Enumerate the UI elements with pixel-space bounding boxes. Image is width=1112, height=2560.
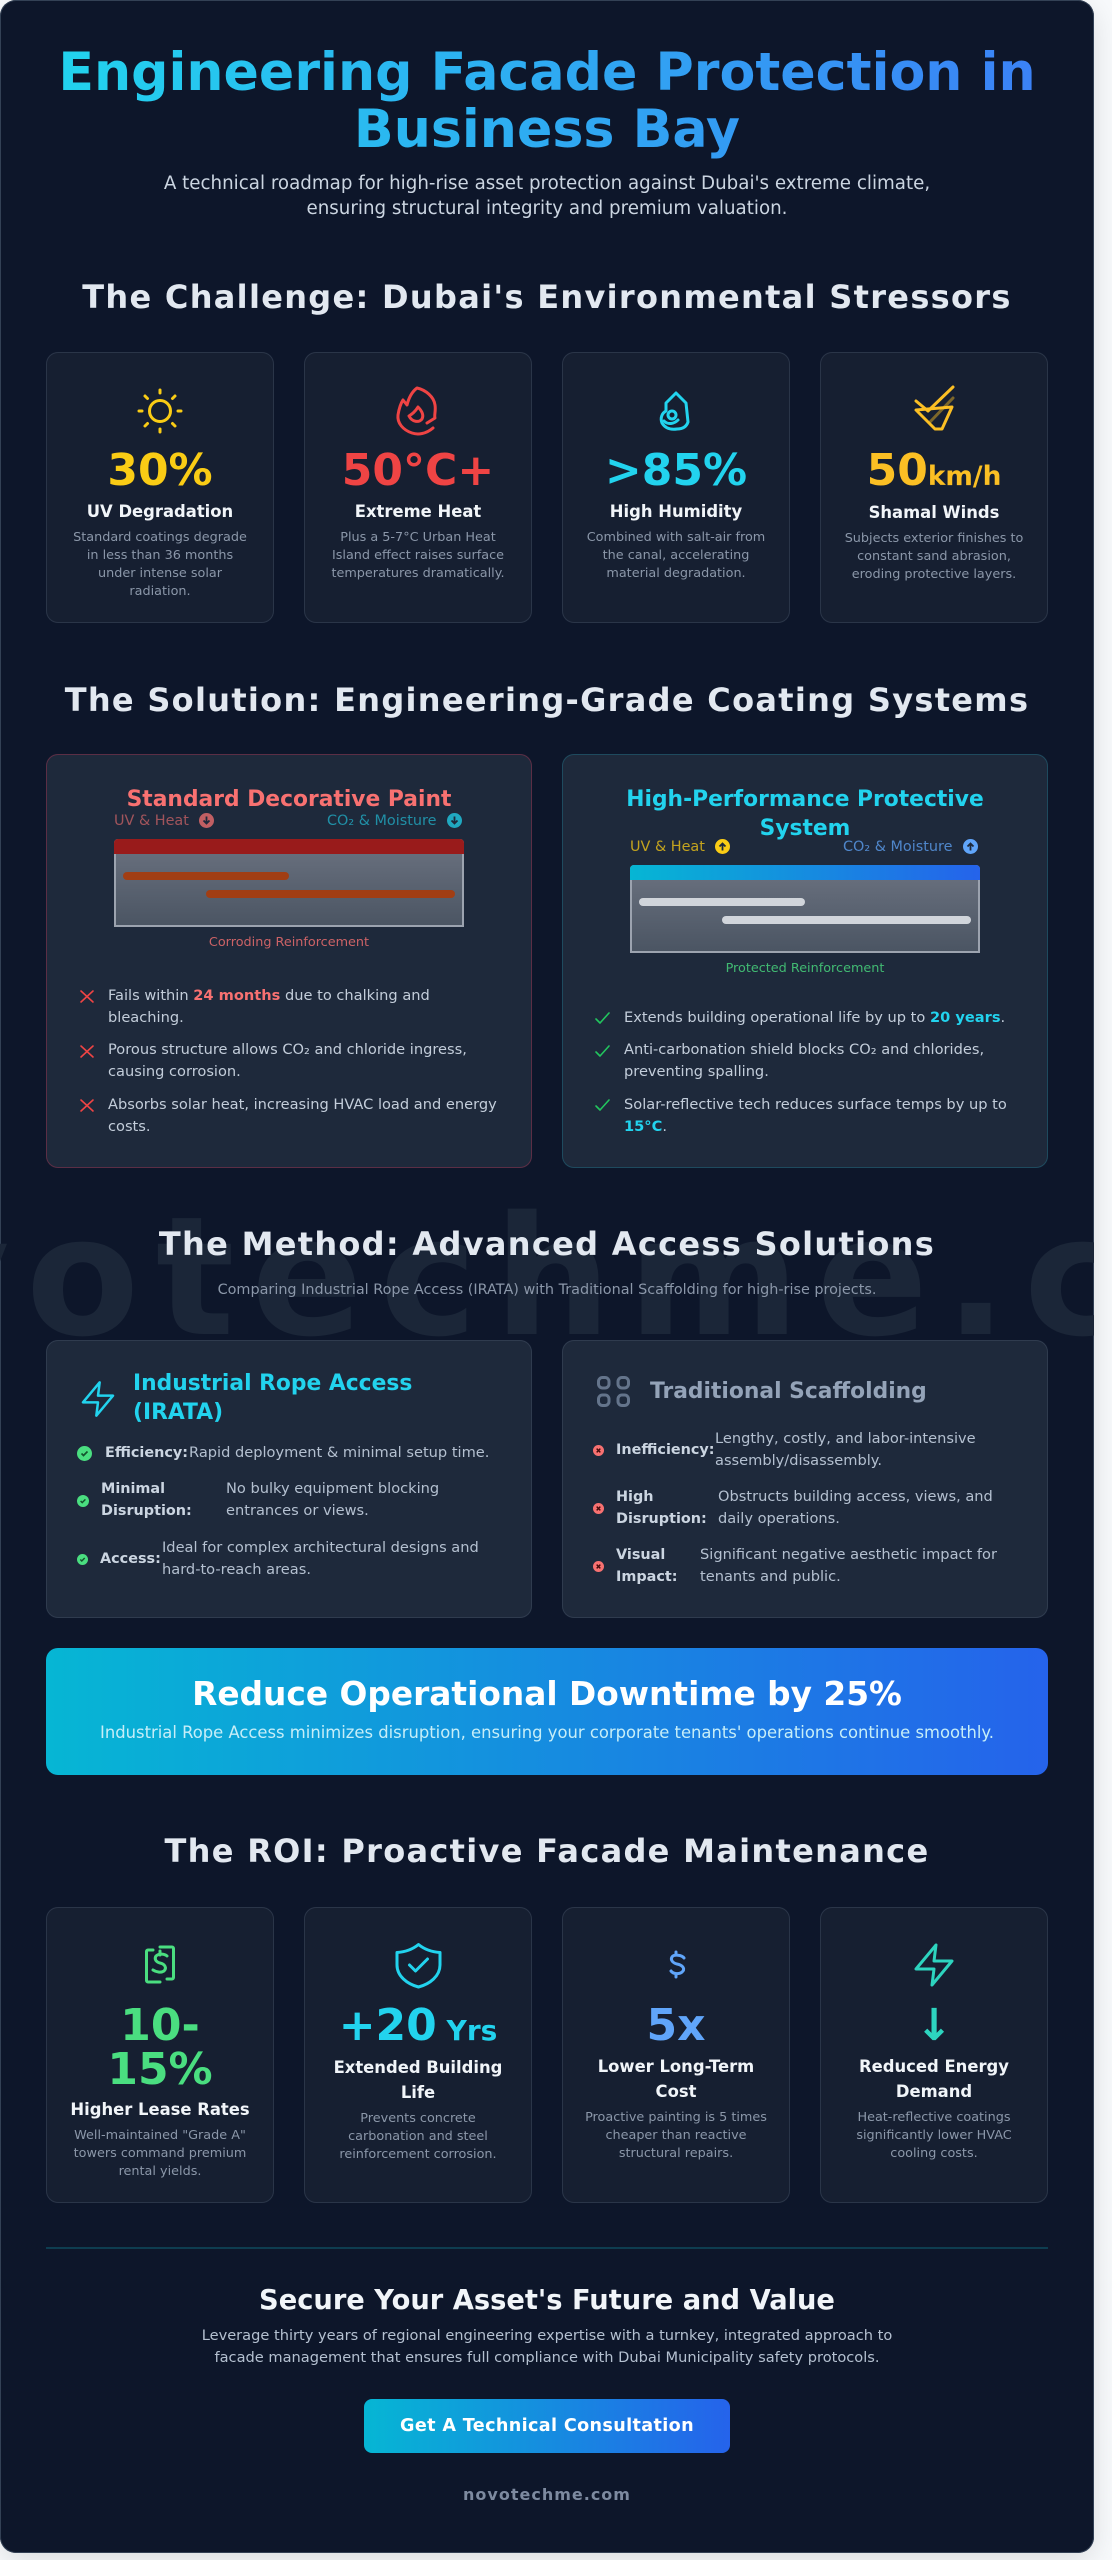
text bbox=[616, 1544, 678, 1588]
rebar bottom bbox=[722, 916, 971, 924]
item bbox=[108, 1041, 467, 1080]
banner heading: Reduce Operational Downtime by 25% bbox=[192, 1675, 902, 1713]
diagram caption: Corroding Reinforcement bbox=[209, 935, 369, 950]
panel title: Standard Decorative Paint bbox=[127, 787, 451, 812]
stat label: High Humidity bbox=[610, 502, 742, 521]
icon: cross bbox=[593, 1502, 604, 1514]
text: Inefficiency: bbox=[616, 1442, 715, 1458]
icon: scaffold grid bbox=[597, 1376, 630, 1407]
stat: >85% bbox=[605, 445, 747, 496]
closing text: Leverage thirty years of regional engineering expertise with a turnkey, integrated approach to bbox=[202, 2327, 892, 2344]
description: rental yields. bbox=[119, 2164, 201, 2179]
description: reinforcement corrosion. bbox=[339, 2147, 497, 2162]
rebar bottom bbox=[206, 890, 455, 898]
coating layer bbox=[630, 865, 980, 880]
label: UV and heat: UV & Heat bbox=[630, 839, 705, 855]
list item: inefficiency bbox=[562, 1428, 1048, 1474]
icon: flame bbox=[396, 386, 437, 436]
text: Obstructs building access, views, and bbox=[718, 1488, 993, 1505]
description: temperatures dramatically. bbox=[331, 566, 505, 581]
stat: 30% bbox=[107, 445, 213, 496]
icon: bolt bbox=[910, 1941, 958, 1989]
text: Rapid deployment & minimal setup time. bbox=[189, 1444, 489, 1461]
stat label: Higher Lease Rates bbox=[70, 2100, 250, 2118]
text: Efficiency: bbox=[105, 1445, 188, 1461]
item bbox=[108, 1096, 497, 1135]
card: UV degradation bbox=[46, 352, 274, 623]
icon: check bbox=[595, 1099, 610, 1111]
text: Lengthy, costly, and labor-intensive bbox=[715, 1430, 976, 1447]
diagram caption: Protected Reinforcement bbox=[726, 961, 884, 976]
description: Island effect raises surface bbox=[332, 548, 504, 563]
list: benefits bbox=[595, 1008, 1007, 1135]
text: entrances or views. bbox=[226, 1502, 369, 1519]
icon: check bbox=[77, 1446, 92, 1461]
list: failures bbox=[80, 987, 497, 1135]
text: Minimal bbox=[101, 1481, 165, 1497]
icon: bolt bbox=[82, 1381, 114, 1417]
button: Get A Technical Consultation bbox=[400, 2416, 694, 2436]
description: cheaper than reactive bbox=[605, 2128, 747, 2143]
button bbox=[364, 2399, 730, 2453]
description: Proactive painting is 5 times bbox=[585, 2110, 767, 2124]
stat label: Life bbox=[401, 2082, 435, 2102]
panel title bbox=[133, 1370, 412, 1424]
description bbox=[562, 2108, 790, 2163]
title bbox=[58, 43, 1036, 160]
panel: high-performance protective system bbox=[562, 754, 1048, 1168]
panel: scaffolding bbox=[562, 1340, 1048, 1618]
icon: down arrow CO2 bbox=[447, 813, 462, 828]
stat label bbox=[304, 2054, 532, 2104]
item: preventing spalling. bbox=[624, 1063, 769, 1080]
banner text: Industrial Rope Access minimizes disruption, ensuring your corporate tenants' operations continue smoothly. bbox=[100, 1723, 994, 1742]
subtitle: A technical roadmap for high-rise asset protection against Dubai's extreme climate, bbox=[164, 172, 930, 194]
coating layer bbox=[114, 839, 464, 854]
closing text bbox=[0, 2325, 1094, 2369]
text: daily operations. bbox=[718, 1510, 840, 1527]
description: structural repairs. bbox=[619, 2146, 733, 2161]
stat label: Reduced Energy bbox=[859, 2056, 1009, 2076]
text bbox=[162, 1537, 479, 1581]
stat label: Demand bbox=[896, 2082, 972, 2100]
description: Standard coatings degrade bbox=[73, 530, 247, 544]
text bbox=[616, 1486, 707, 1530]
item: causing corrosion. bbox=[108, 1063, 241, 1080]
description: Prevents concrete bbox=[360, 2110, 476, 2126]
description: in less than 36 months bbox=[87, 548, 233, 563]
icon: check bbox=[595, 1045, 610, 1057]
description: towers command premium bbox=[74, 2146, 246, 2161]
title: Engineering Facade Protection in bbox=[58, 43, 1036, 103]
item: Fails within 24 months due to chalking and bbox=[108, 987, 430, 1004]
text: No bulky equipment blocking bbox=[226, 1480, 439, 1497]
description: under intense solar bbox=[98, 566, 222, 581]
stat: 15% bbox=[107, 2044, 213, 2094]
stat: +20 Yrs bbox=[339, 2000, 497, 2050]
card: high humidity bbox=[562, 352, 790, 623]
heading: the method: The Method: Advanced Access Solutions bbox=[159, 1225, 935, 1263]
stat label: Shamal Winds bbox=[869, 503, 999, 522]
card: extreme heat bbox=[304, 352, 532, 623]
item: Absorbs solar heat, increasing HVAC load and energy bbox=[108, 1096, 497, 1113]
heading: the solution: The Solution: Engineering-Grade Coating Systems bbox=[65, 681, 1029, 719]
description bbox=[845, 530, 1023, 582]
label: CO2 and moisture: CO₂ & Moisture bbox=[843, 839, 952, 855]
description bbox=[331, 530, 505, 581]
stat: 50km/h bbox=[867, 445, 1001, 496]
list item: access bbox=[46, 1537, 532, 1583]
icon: cross bbox=[593, 1444, 604, 1456]
item: Solar-reflective tech reduces surface temps by up to bbox=[624, 1096, 1007, 1113]
stat arrow: ↓ bbox=[916, 2000, 952, 2050]
callout banner bbox=[46, 1648, 1048, 1775]
text: Impact: bbox=[616, 1569, 678, 1585]
stat: 5x bbox=[646, 2000, 706, 2050]
text bbox=[101, 1481, 192, 1519]
description bbox=[587, 530, 765, 581]
panel title: (IRATA) bbox=[133, 1400, 223, 1424]
subtitle: ensuring structural integrity and premium valuation. bbox=[306, 198, 788, 219]
icon: shield check bbox=[395, 1943, 442, 1988]
stat label bbox=[562, 2054, 790, 2104]
item: 15°C. bbox=[624, 1118, 667, 1135]
item bbox=[108, 987, 430, 1026]
panel: standard decorative paint bbox=[46, 754, 532, 1168]
label: CO2 and moisture: CO₂ & Moisture bbox=[327, 813, 436, 829]
description: Well-maintained "Grade A" bbox=[74, 2128, 246, 2142]
heading: the ROI: The ROI: Proactive Facade Maintenance bbox=[165, 1832, 929, 1870]
item: Extends building operational life by up to 20 years. bbox=[624, 1008, 1005, 1026]
icon: dollar note bbox=[136, 1941, 184, 1989]
icon: check bbox=[77, 1495, 89, 1507]
text: assembly/disassembly. bbox=[715, 1452, 882, 1469]
icon: sun bbox=[138, 388, 182, 434]
text: High bbox=[616, 1489, 654, 1505]
footer url: novotechme.com bbox=[463, 2485, 631, 2504]
diagram: protected cross-section bbox=[630, 839, 980, 976]
text bbox=[718, 1486, 993, 1530]
description: Plus a 5-7°C Urban Heat bbox=[340, 530, 496, 544]
icon: check bbox=[77, 1554, 88, 1564]
description: the canal, accelerating bbox=[603, 548, 749, 563]
card: lower long-term cost bbox=[562, 1907, 790, 2203]
panel: rope access bbox=[46, 1340, 532, 1618]
icon: dollar bbox=[652, 1941, 700, 1989]
title: Business Bay bbox=[354, 100, 740, 160]
stat: 10- bbox=[120, 2000, 200, 2050]
subtitle bbox=[164, 172, 930, 219]
item: Anti-carbonation shield blocks CO₂ and chlorides, bbox=[624, 1041, 984, 1058]
text: Ideal for complex architectural designs and bbox=[162, 1539, 479, 1556]
method subtitle: Comparing Industrial Rope Access (IRATA) with Traditional Scaffolding for high-rise projects. bbox=[218, 1282, 876, 1298]
card: extended building life bbox=[304, 1907, 532, 2203]
list item: high disruption bbox=[562, 1486, 1048, 1532]
item: costs. bbox=[108, 1118, 151, 1135]
description: carbonation and steel bbox=[348, 2129, 488, 2144]
description bbox=[304, 2110, 532, 2164]
description: radiation. bbox=[129, 584, 191, 599]
panel title: High-Performance Protective bbox=[626, 787, 984, 812]
description: Subjects exterior finishes to bbox=[845, 530, 1023, 546]
icon: cross bbox=[80, 1045, 94, 1058]
icon: down arrow UV bbox=[199, 813, 214, 828]
text bbox=[700, 1544, 997, 1588]
stat bbox=[46, 2004, 274, 2092]
closing heading: Secure Your Asset's Future and Value bbox=[259, 2285, 835, 2316]
panel title: System bbox=[760, 816, 850, 841]
description: cooling costs. bbox=[890, 2146, 978, 2161]
text bbox=[226, 1478, 439, 1522]
description: eroding protective layers. bbox=[852, 567, 1016, 582]
text bbox=[715, 1428, 976, 1472]
icon: up arrow CO2 bbox=[963, 839, 978, 854]
label: UV and heat: UV & Heat bbox=[114, 813, 189, 829]
icon: check bbox=[595, 1012, 610, 1024]
description: Heat-reflective coatings bbox=[857, 2110, 1011, 2124]
concrete block bbox=[114, 839, 464, 927]
item bbox=[624, 1041, 984, 1080]
stat label: UV Degradation bbox=[87, 502, 233, 521]
stat label: Extended Building bbox=[334, 2058, 502, 2076]
card: reduced energy demand bbox=[820, 1907, 1048, 2203]
panel title: Traditional Scaffolding bbox=[650, 1378, 927, 1404]
heading: the challenge: The Challenge: Dubai's Environmental Stressors bbox=[82, 278, 1012, 316]
description bbox=[46, 2126, 274, 2181]
description: significantly lower HVAC bbox=[856, 2128, 1012, 2143]
rebar top bbox=[639, 898, 805, 906]
rebar top bbox=[123, 872, 289, 880]
icon: water drop bbox=[660, 391, 690, 431]
description bbox=[73, 530, 247, 599]
card: shamal winds bbox=[820, 352, 1048, 623]
icon: cross bbox=[80, 990, 94, 1003]
item bbox=[624, 1096, 1007, 1135]
list item: visual impact bbox=[562, 1544, 1048, 1590]
stat label: Cost bbox=[656, 2082, 696, 2100]
icon: wind bbox=[914, 385, 955, 430]
description bbox=[820, 2108, 1048, 2163]
description: constant sand abrasion, bbox=[857, 549, 1011, 564]
icon: cross bbox=[593, 1560, 604, 1572]
text: Disruption: bbox=[616, 1511, 707, 1527]
description: material degradation. bbox=[606, 566, 746, 581]
stat label: Lower Long-Term bbox=[598, 2056, 754, 2076]
panel title bbox=[626, 787, 984, 841]
closing text: facade management that ensures full compliance with Dubai Municipality safety protocols. bbox=[214, 2349, 880, 2366]
description: Combined with salt-air from bbox=[587, 530, 765, 544]
card: higher lease rates bbox=[46, 1907, 274, 2203]
concrete block bbox=[630, 865, 980, 953]
icon: cross bbox=[80, 1099, 94, 1112]
text: Visual bbox=[616, 1547, 665, 1563]
text: Disruption: bbox=[101, 1503, 192, 1519]
panel title: Industrial Rope Access bbox=[133, 1370, 412, 1396]
item: bleaching. bbox=[108, 1009, 184, 1026]
diagram: corroding cross-section bbox=[114, 813, 464, 950]
text: hard-to-reach areas. bbox=[162, 1561, 311, 1578]
text: tenants and public. bbox=[700, 1568, 841, 1585]
list item: minimal disruption bbox=[77, 1480, 439, 1519]
text: Significant negative aesthetic impact for bbox=[700, 1546, 997, 1563]
icon: up arrow UV bbox=[715, 839, 730, 854]
item: Porous structure allows CO₂ and chloride ingress, bbox=[108, 1041, 467, 1058]
text: Access: bbox=[100, 1551, 161, 1567]
stat label bbox=[820, 2054, 1048, 2104]
stat: 50°C+ bbox=[342, 445, 494, 496]
list item: efficiency bbox=[77, 1444, 489, 1461]
stat label: Extreme Heat bbox=[355, 502, 481, 521]
